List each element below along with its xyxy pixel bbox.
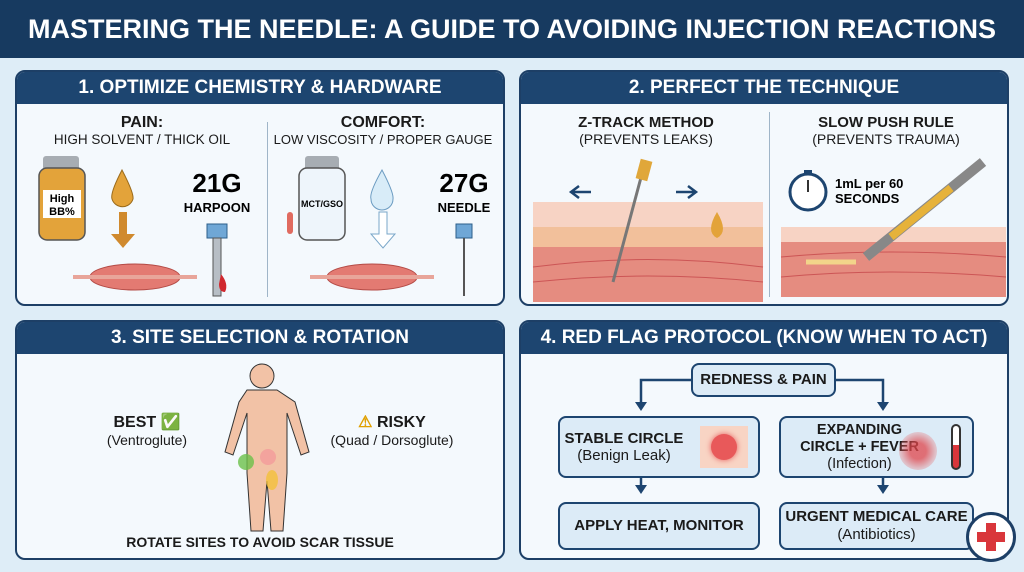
expanding circle box: EXPANDING bbox=[817, 422, 902, 438]
heading 1 bbox=[17, 72, 503, 104]
apply heat box bbox=[558, 502, 760, 550]
comfort text bbox=[274, 114, 492, 147]
panel: technique: SECONDS bbox=[835, 191, 900, 206]
slow push text: SLOW PUSH RULE bbox=[818, 114, 954, 131]
icon: medical cross bbox=[966, 512, 1016, 562]
title: MASTERING THE NEEDLE: A GUIDE TO AVOIDING INJECTION REACTIONS bbox=[28, 14, 996, 44]
vial orange bbox=[39, 156, 85, 240]
panel: technique: 1mL per 60 bbox=[835, 176, 903, 191]
redness box bbox=[691, 363, 836, 397]
pain text bbox=[54, 114, 230, 147]
risky label: ⚠ RISKY bbox=[358, 414, 426, 431]
icons: HARPOON bbox=[184, 200, 250, 215]
comfort text: LOW VISCOSITY / PROPER GAUGE bbox=[274, 132, 492, 147]
best label: BEST ✅ bbox=[113, 414, 181, 431]
vial clear: MCT/GSO bbox=[301, 199, 343, 209]
icons: NEEDLE bbox=[438, 200, 491, 215]
heading 1: 1. OPTIMIZE CHEMISTRY & HARDWARE bbox=[78, 77, 442, 98]
title bbox=[0, 0, 1024, 58]
expanding circle box: (Infection) bbox=[827, 456, 892, 472]
urgent box: URGENT MEDICAL CARE bbox=[785, 508, 968, 525]
heading 2 bbox=[521, 72, 1007, 104]
vial orange: BB% bbox=[49, 206, 75, 218]
z-track text: (PREVENTS LEAKS) bbox=[579, 131, 713, 147]
best label bbox=[107, 412, 187, 448]
pain text: PAIN: bbox=[121, 114, 163, 131]
panel: technique bbox=[519, 70, 1009, 306]
rotate text: ROTATE SITES TO AVOID SCAR TISSUE bbox=[126, 534, 394, 550]
vial clear bbox=[299, 156, 345, 240]
best label: (Ventroglute) bbox=[107, 432, 187, 448]
panel: optimize chemistry bbox=[15, 70, 505, 306]
slow push text: (PREVENTS TRAUMA) bbox=[812, 131, 960, 147]
expanding circle box: CIRCLE + FEVER bbox=[800, 439, 919, 455]
heading 3: 3. SITE SELECTION & ROTATION bbox=[111, 327, 409, 348]
icons: 21G bbox=[192, 168, 242, 198]
stable circle box: STABLE CIRCLE bbox=[565, 430, 683, 447]
z-track text bbox=[578, 114, 714, 147]
urgent box bbox=[779, 502, 974, 550]
apply heat box: APPLY HEAT, MONITOR bbox=[574, 517, 744, 534]
heading 2: 2. PERFECT THE TECHNIQUE bbox=[629, 77, 899, 98]
stable circle box: (Benign Leak) bbox=[577, 447, 671, 464]
vial orange: High bbox=[50, 193, 74, 205]
risky label bbox=[331, 414, 453, 448]
panel: site selection bbox=[15, 320, 505, 560]
redness box: REDNESS & PAIN bbox=[700, 371, 827, 388]
panel: red flag bbox=[519, 320, 1009, 560]
icons: 27G bbox=[439, 168, 489, 198]
icons bbox=[38, 156, 491, 296]
z-track text: Z-TRACK METHOD bbox=[578, 114, 714, 131]
heading 4 bbox=[521, 322, 1007, 354]
urgent box: (Antibiotics) bbox=[837, 526, 916, 543]
heading 4: 4. RED FLAG PROTOCOL (KNOW WHEN TO ACT) bbox=[541, 327, 987, 348]
stable circle box bbox=[558, 416, 760, 478]
pain text: HIGH SOLVENT / THICK OIL bbox=[54, 132, 230, 147]
body figure bbox=[224, 364, 310, 532]
heading 3 bbox=[17, 322, 503, 354]
expanding circle box bbox=[779, 416, 974, 478]
flow arrows bbox=[635, 378, 889, 494]
slow push text bbox=[812, 114, 960, 147]
divider bbox=[267, 122, 268, 297]
comfort text: COMFORT: bbox=[341, 114, 425, 131]
risky label: (Quad / Dorsoglute) bbox=[331, 432, 453, 448]
